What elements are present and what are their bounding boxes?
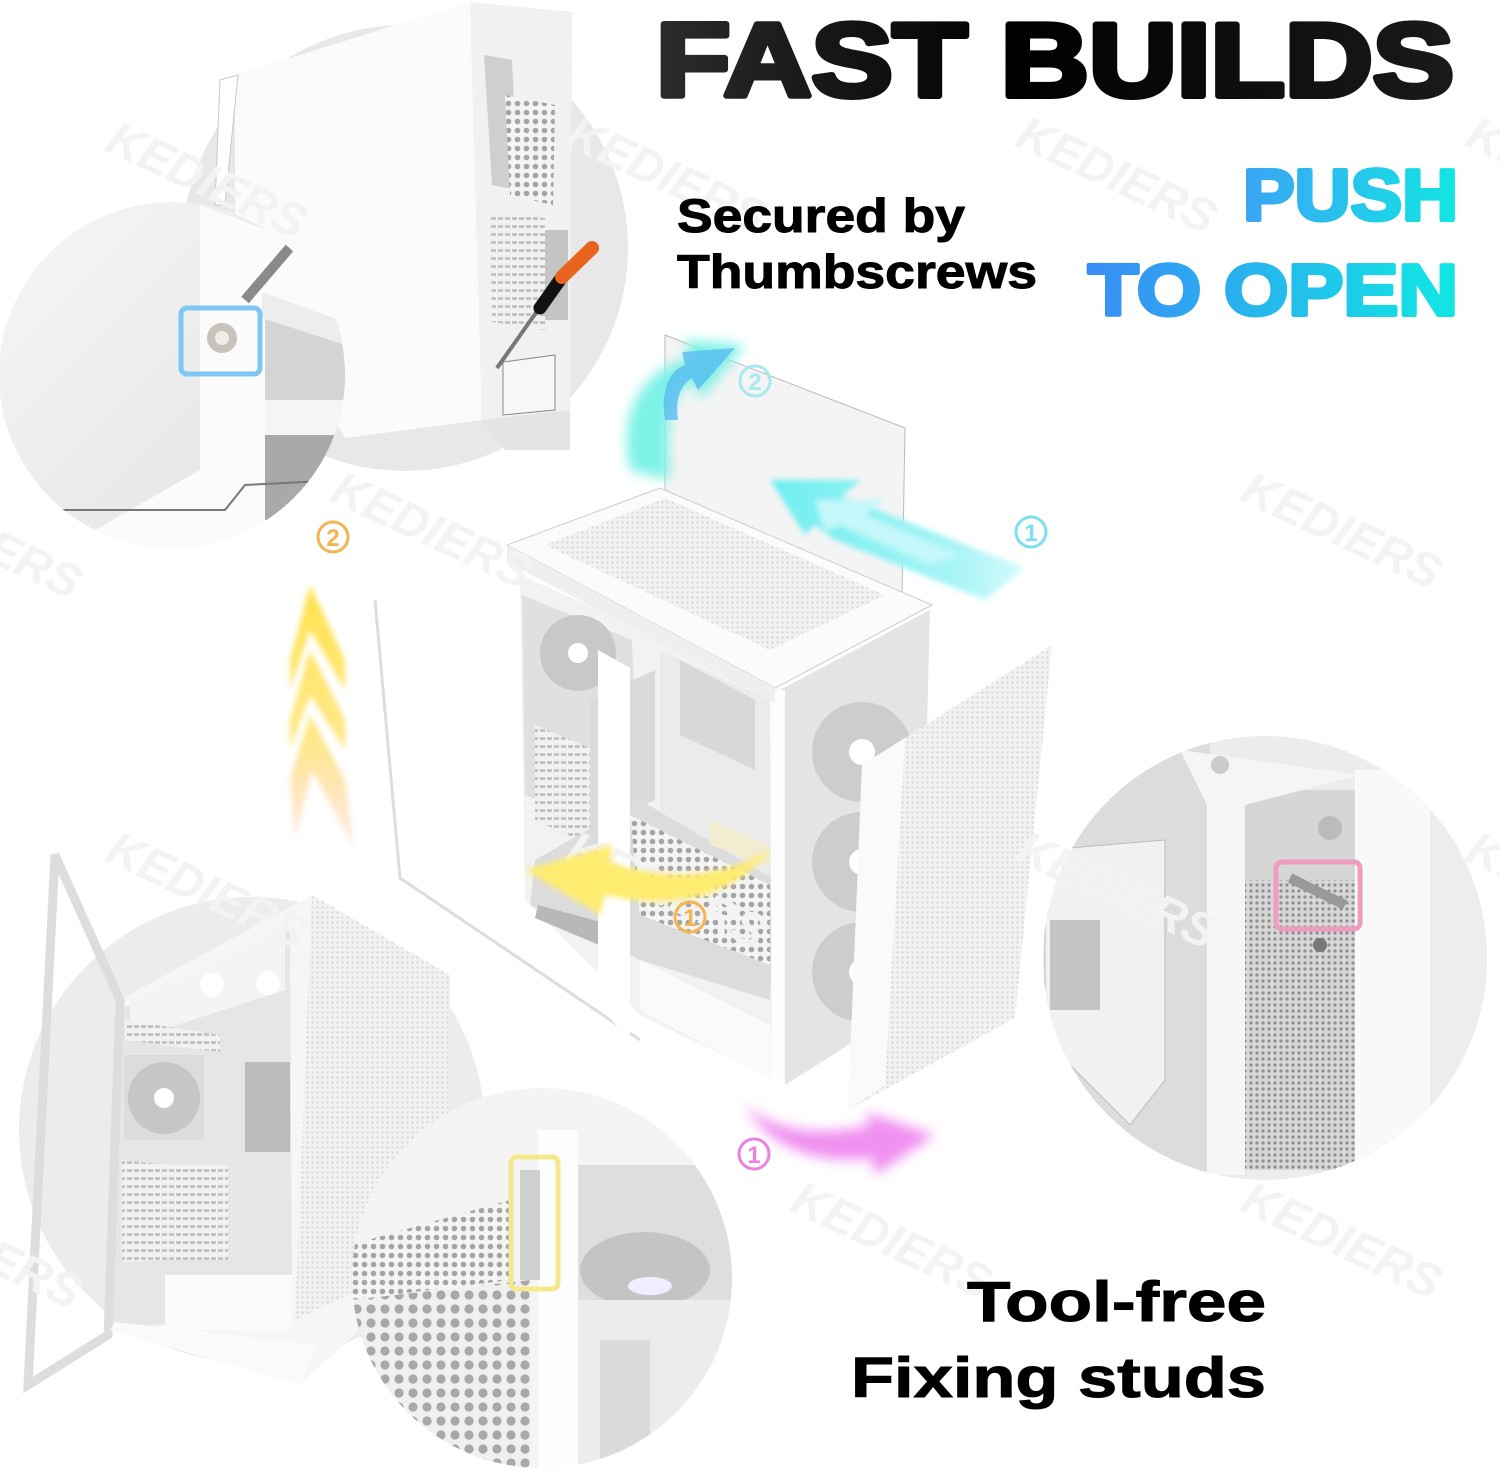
case interior <box>520 575 785 1085</box>
labels: step numbers: 1 <box>683 905 697 932</box>
panel: thumbscrew case view <box>182 2 628 471</box>
watermarks: KEDIERS <box>1009 822 1224 960</box>
labels: step numbers: 1 <box>747 1142 761 1169</box>
callout: blue highlight box <box>181 308 260 374</box>
heading: push to open: PUSH <box>1243 156 1458 236</box>
watermarks: KEDIERS <box>1234 462 1449 600</box>
heading: secured by thumbscrews: Thumbscrews <box>677 245 1037 298</box>
heading: tool-free fixing studs <box>851 1270 1266 1410</box>
watermarks: KEDIERS <box>559 822 774 960</box>
fans side <box>780 610 930 1085</box>
arrow: pink curved right <box>745 1105 935 1175</box>
callout: pink highlight box <box>1276 862 1360 929</box>
panel: stud detail circle right <box>1043 736 1490 1180</box>
labels: step numbers: 2 <box>326 525 340 552</box>
watermarks: KEDIERS <box>99 112 314 250</box>
heading: tool-free fixing studs: Fixing studs <box>851 1346 1266 1410</box>
labels: step numbers <box>318 366 1046 1169</box>
labels: step numbers: 1 <box>1024 520 1038 547</box>
callout: yellow highlight box <box>511 1157 558 1289</box>
watermarks: KEDIERS <box>1009 107 1224 245</box>
panel: thumbscrew detail circle <box>0 202 345 550</box>
arrow: cyan upward curve <box>627 340 745 480</box>
heading: secured by thumbscrews: Secured by <box>677 189 965 242</box>
panel: open case lower left <box>19 855 485 1385</box>
rear panel lifted <box>665 335 905 600</box>
panel: main case <box>360 335 1052 1110</box>
top mesh panel <box>507 488 932 688</box>
heading: push to open <box>1088 156 1458 331</box>
heading: secured by thumbscrews <box>677 189 1037 298</box>
watermarks: KEDIERS <box>1234 1172 1449 1310</box>
removed side glass frame <box>375 600 640 1040</box>
watermarks: KEDIERS <box>324 462 539 600</box>
title: FAST BUILDS <box>656 3 1454 119</box>
arrow: yellow curved left <box>525 845 770 915</box>
watermarks: KEDIERS <box>99 822 314 960</box>
icon: screwdriver <box>497 248 592 368</box>
watermarks: KEDIERS <box>559 107 774 245</box>
arrow: cyan left chevrons <box>770 480 1025 600</box>
heading: tool-free fixing studs: Tool-free <box>967 1270 1266 1334</box>
labels: step numbers: 2 <box>748 369 762 396</box>
front mesh panel <box>848 645 1052 1110</box>
watermarks: KEDIERS <box>784 467 999 605</box>
panel: hinge detail circle <box>350 1088 735 1471</box>
arrow: yellow up chevrons <box>290 585 355 850</box>
heading: push to open: TO OPEN <box>1088 251 1458 331</box>
watermarks: KEDIERS <box>784 1172 999 1310</box>
